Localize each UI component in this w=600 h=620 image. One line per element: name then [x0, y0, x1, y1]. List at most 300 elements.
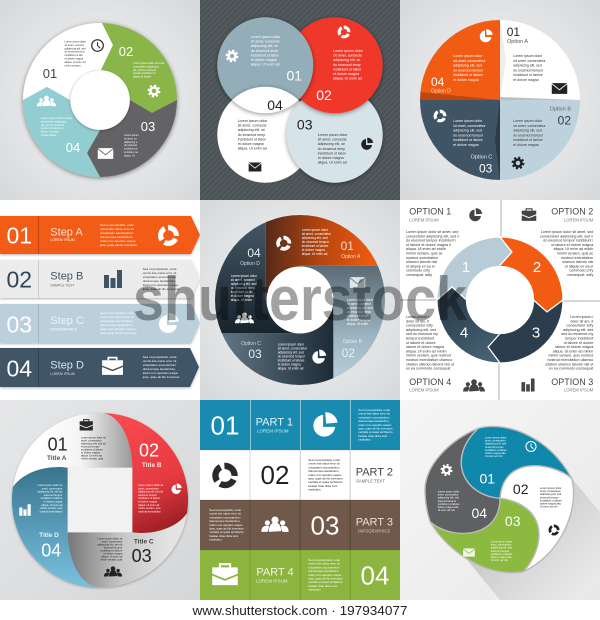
text A: incididunt ut labore	[302, 244, 329, 248]
text 01: Lorem ipsum dolor	[64, 40, 86, 44]
label: INFOGRAPHICS	[50, 328, 78, 332]
number 04: 04	[361, 560, 389, 590]
text 02: tempor incididunt ut	[133, 71, 156, 75]
text 1: ipsa, quae ab illo inventore	[358, 426, 393, 430]
text C: aliqua. Ut enim ad	[101, 554, 123, 558]
text 3: beatae vitae dicta sunt	[209, 534, 238, 538]
text: Sed ut perspiciatis, unde	[143, 267, 177, 271]
text 02: et dolore magna	[333, 72, 359, 76]
text D: adipiscing elit, sed do	[37, 490, 63, 494]
text 02: Lorem ipsum dolor sit amet,	[133, 61, 165, 65]
icon: gear	[513, 158, 523, 168]
text A: do eiusmod tempor	[302, 240, 330, 244]
ring segments	[23, 23, 177, 177]
row 4 tiles	[200, 550, 400, 600]
text C: incididunt ut labore	[101, 548, 123, 552]
number 02: 02	[139, 440, 159, 460]
text C: adipiscing elit, sed	[278, 350, 304, 354]
option D: Option D	[431, 88, 451, 94]
arrow ring	[437, 237, 563, 363]
text D: et dolore magna	[453, 78, 479, 82]
text B: do eiusmod tempor	[513, 133, 544, 137]
text: totam rem aperiam eaque	[100, 239, 136, 243]
text 02: incididunt ut labor	[333, 67, 362, 71]
option B: Option B	[343, 339, 363, 345]
option 1 text: commodo cnfy	[406, 269, 430, 273]
icon: gear	[149, 86, 159, 96]
part 1: PART 1	[256, 417, 293, 429]
text C: Lorem ipsum dolor	[278, 342, 305, 346]
part 4 label: LOREM IPSUM	[256, 578, 288, 584]
text 02: adipiscing elit, sed	[540, 492, 562, 496]
text 01: Lorem ipsum dolor	[485, 436, 507, 440]
text 4: ipsa, quae ab illo inventore	[308, 576, 343, 580]
number 01: 01	[480, 470, 495, 486]
text: voluptatem accusantium	[143, 363, 176, 367]
text A: Lorem ipsum dolor sit	[81, 436, 106, 440]
option 3 text: minim veniam, quis nostrud	[548, 354, 593, 358]
quadrants	[420, 20, 580, 180]
option 2 text: ullamco laboris nisi	[562, 260, 593, 264]
text 2: omnis iste natus error sit	[308, 462, 340, 466]
title D: Title D	[39, 532, 59, 539]
number 01: 01	[287, 68, 302, 84]
text 02: eiusmod tempor	[540, 495, 559, 499]
text 03: et dolore ma	[124, 151, 139, 154]
text D: aliqua. Ut enim ad	[41, 503, 63, 507]
circle 04	[217, 87, 313, 183]
text: ipsa, quae ab illo inventore	[100, 331, 137, 335]
text A: sit amet, consectetur	[513, 59, 546, 63]
number 01: 01	[211, 410, 239, 440]
number 03: 03	[132, 546, 152, 566]
option D: Option D	[240, 261, 260, 267]
icon: briefcase	[522, 209, 536, 221]
option 1 text: Lorem ipsum dolor sit amet, sed	[406, 230, 458, 234]
text 03: Ut enim ad min	[491, 558, 509, 562]
text 02: Lorem ipsum dolor	[540, 486, 562, 490]
numeral 3: 3	[532, 324, 540, 342]
text 3: Sed ut perspiciatis, unde	[209, 508, 241, 512]
option 4 text: ut labore et dolore	[406, 341, 436, 345]
text A: et dolore magna	[81, 450, 100, 454]
text 04: Lorem ipsum dolor	[438, 490, 459, 494]
option 3 text: ut labore et dolore	[564, 341, 593, 345]
text D: nostrud exercitation	[40, 509, 63, 513]
text 1: totam rem aperiam eaque	[358, 423, 392, 427]
text 2: Sed ut perspiciatis, unde	[308, 458, 340, 462]
option 2 text: consequat. adfy	[567, 273, 593, 277]
footer band	[0, 600, 600, 620]
text: doloremque laudantium,	[143, 279, 176, 283]
ribbon C	[0, 304, 200, 343]
swirl segments	[12, 413, 188, 587]
number 03: 03	[311, 510, 339, 540]
text A: aliqua. Ut enim ad	[81, 454, 102, 458]
option 2 text: ut aliquip ex ea ei	[565, 264, 593, 268]
icon: pie	[361, 137, 373, 150]
text B: eiusmod tempor	[138, 493, 157, 497]
text 02: labore et dolore	[133, 75, 152, 79]
text D: Lorem ipsum dolor sit	[38, 483, 63, 487]
circle 04 overlap	[231, 85, 300, 114]
text B: sit amet, consectetur	[513, 124, 546, 128]
text 1: omnis iste natus error sit	[358, 412, 390, 416]
text B: adipiscing elit, sed	[347, 306, 373, 310]
text 02: aliqua. Ut enim ad	[333, 77, 362, 81]
part 4: PART 4	[256, 567, 294, 579]
text 2: doloremque laudantium,	[308, 469, 340, 473]
text 02: amet, consectetur	[540, 489, 561, 493]
icon: cycle	[549, 525, 559, 535]
text 03: et dolore magna	[318, 156, 344, 160]
icon: envelope	[463, 548, 475, 557]
number 02: 02	[342, 346, 355, 360]
text 03: eiusmod tempor	[491, 549, 509, 553]
option B: Option B	[550, 106, 571, 112]
text 4: Sed ut perspiciatis, unde	[308, 558, 340, 562]
text 01: aliqua. Ut enim ad	[251, 63, 280, 67]
panel: quadrant pie	[400, 0, 600, 200]
text 04: incididunt ut labor	[238, 137, 267, 141]
text A: adipiscing elit, sed	[302, 236, 328, 240]
option 4 text: consectetur sdfy	[406, 324, 433, 328]
text C: incididunt ut labore	[278, 358, 305, 362]
text 01: Lorem ipsum dolor	[251, 35, 281, 39]
number 02: 02	[261, 460, 289, 490]
option 4 text: sed do eiusmod my	[406, 332, 438, 336]
icon: people	[235, 313, 254, 323]
text 02: Lorem ipsum dolor	[333, 49, 364, 53]
text: doloremque laudantium,	[143, 367, 176, 371]
text: voluptatem accusantium	[100, 231, 134, 235]
option 1 text: consectetur adipiscing elit, sed n	[406, 234, 459, 238]
text D: incididunt ut lab	[231, 290, 253, 294]
row 2 tiles	[200, 450, 400, 500]
text 03: do eiusmod	[124, 144, 138, 147]
step C: Step C	[50, 315, 84, 327]
text 01: incididunt ut lab	[64, 53, 83, 57]
icon: pie	[159, 312, 179, 333]
icon: cycle	[338, 26, 350, 38]
text 1: doloremque laudantium,	[358, 419, 390, 423]
number 02: 02	[316, 87, 332, 103]
text 01: minim veniam	[64, 63, 80, 67]
text: omnis iste natus error sit	[100, 315, 134, 319]
option 4 label: LOREM IPSUM	[409, 388, 439, 392]
option 1 text: consequat. adfy	[406, 273, 432, 277]
panel: tile grid	[200, 400, 400, 600]
text B: amet, consectetur	[138, 486, 159, 490]
option 2 label: LOREM IPSUM	[564, 218, 594, 222]
icon: people	[463, 379, 485, 391]
text B: sit amet, consect	[347, 302, 371, 306]
text C: Lorem ipsum dolor sit	[98, 536, 123, 540]
icon: envelope	[249, 163, 261, 171]
option C: Option C	[241, 341, 261, 347]
text 04: elit, sed do eiusmod	[41, 123, 64, 127]
text B: et dolore magna	[513, 143, 539, 147]
text A: Lorem ipsum dolor	[513, 54, 543, 58]
text D: adipiscing elit, sed	[453, 64, 482, 68]
panel: options arrow ring	[400, 200, 600, 400]
option 4 text: nostrud exercitation ullamco	[406, 358, 452, 362]
option A: Option A	[507, 39, 528, 45]
text B: et dolore magna	[138, 500, 158, 504]
option 4 text: minim veniam, quis nostrud	[406, 354, 451, 358]
icon: briefcase	[102, 358, 123, 375]
text 2: ipsa, quae ab illo inventore	[308, 476, 343, 480]
title B: Title B	[142, 462, 162, 469]
text 02: incididunt ut labore	[540, 498, 562, 502]
text 03: dolore magna aliq	[491, 555, 512, 559]
text B: Lorem ipsum dolor sit	[138, 483, 163, 487]
text 3: ipsa, quae ab illo inventore	[209, 526, 244, 530]
option 2 text: aliqua. Ut enim ad eiddh	[554, 247, 593, 251]
panel: interlocking circles	[200, 0, 400, 200]
text D: minim veniam, quis	[40, 506, 63, 510]
icon: pie	[312, 349, 326, 364]
icon: people	[37, 96, 56, 106]
text 3: veritatis et quasi architecto	[209, 530, 244, 534]
text 1: veritatis et quasi architecto	[358, 430, 393, 434]
text: totam rem aperiam eaque	[143, 371, 178, 375]
text 03: sit amet, consecte	[318, 138, 347, 142]
text 1: explicabo.	[358, 438, 372, 442]
step B: Step B	[50, 271, 83, 283]
number 04: 04	[7, 356, 32, 382]
text D: Lorem ipsum dolor	[453, 54, 483, 58]
option 3 text: sed do eiusmod my	[561, 332, 593, 336]
text D: do eiusmod temp	[231, 286, 255, 290]
option 4 title: OPTION 4	[409, 377, 451, 387]
text D: amet, consectetur	[42, 486, 62, 490]
option 2 text: commodo cnfy	[569, 269, 593, 273]
text A: sit amet, consectetur	[302, 232, 332, 236]
long shadow	[455, 478, 600, 600]
option 1 label: LOREM IPSUM	[409, 218, 439, 222]
watermark: shutterstock	[133, 265, 467, 334]
text 1: voluptatem accusantium	[358, 415, 390, 419]
icon: gear	[227, 51, 237, 61]
text 4: doloremque laudantium,	[308, 569, 340, 573]
icon: pie	[469, 208, 482, 221]
text 02: consectetur adipiscing	[133, 64, 159, 68]
text 01: et dolore magna	[251, 58, 277, 62]
row 1 tiles	[200, 400, 400, 450]
option C: Option C	[471, 154, 492, 160]
option 1 title: OPTION 1	[409, 207, 451, 217]
number 04: 04	[267, 97, 283, 113]
step D: Step D	[50, 359, 84, 371]
option 3 text: consectetur sdfy	[566, 324, 593, 328]
text 02: dolore magna aliq	[540, 502, 561, 506]
text 4: omnis iste natus error sit	[308, 562, 340, 566]
part 2 label: SAMPLE TEXT	[356, 478, 385, 484]
part 3: PART 3	[356, 516, 393, 528]
text C: adipiscing elit, sed do	[97, 542, 123, 546]
text C: et dolore magna	[453, 143, 479, 147]
text 01: aliqua. Ut enim ad	[64, 60, 86, 64]
option 4 text: tempor incididunt	[406, 336, 434, 340]
number 01: 01	[48, 434, 68, 454]
swirl segments	[425, 426, 574, 573]
text 3: totam rem aperiam eaque	[209, 523, 243, 527]
number 02: 02	[119, 44, 133, 59]
text 1: Sed ut perspiciatis, unde	[358, 408, 390, 412]
text D: adipiscing elit, sed	[231, 282, 257, 286]
text 01: eiusmod tempor	[485, 445, 504, 449]
text 04: incididunt ut labore	[438, 502, 460, 506]
text: totam rem aperiam eaque	[100, 327, 136, 331]
text 4: totam rem aperiam eaque	[308, 573, 342, 577]
text 4: beatae vitae dicta sunt	[308, 584, 337, 588]
text: ipsa, quae ab illo inventore	[143, 375, 180, 379]
number 03: 03	[479, 162, 493, 176]
text 04: adipiscing elit, se	[238, 128, 265, 132]
option 3 text: Lorem ipsum i	[570, 315, 593, 319]
text C: minim veniam, quis	[100, 558, 123, 562]
text: doloremque laudantium,	[100, 323, 133, 327]
text 03: adipiscing e	[124, 141, 138, 144]
text 2: beatae vitae dicta sunt	[308, 484, 337, 488]
text 03: do eiusmod temp	[318, 147, 345, 151]
option 4 text: adipiscing elit, sed	[406, 328, 436, 332]
text B: do eiusmod temp	[347, 310, 371, 314]
number 03: 03	[248, 347, 262, 361]
numeral 1: 1	[462, 259, 470, 276]
text 3: voluptatem accusantium	[209, 515, 241, 519]
step A: Step A	[50, 226, 83, 238]
number 01: 01	[507, 25, 520, 39]
number 03: 03	[505, 513, 521, 529]
text 01: amet, consectetur	[485, 439, 506, 443]
text 04: dolore magna aliq	[438, 505, 459, 509]
option 1 text: nostrud exercitation	[406, 256, 438, 260]
title C: Title C	[134, 538, 154, 546]
text D: et dolore magna	[44, 500, 63, 504]
option 1 text: minim veniam, quis ac	[406, 252, 443, 256]
option 4 text: aliqua. Ut enim ad minim	[406, 349, 447, 353]
option 2 text: do eiusmod tempor incididunt i	[543, 239, 593, 243]
option 3 text: aliqua. Ut enim ad minim	[553, 349, 593, 353]
option 2 title: OPTION 2	[551, 207, 593, 217]
circle 01	[217, 17, 313, 113]
text B: incididunt ut lab	[347, 314, 369, 318]
option 3 title: OPTION 3	[551, 377, 593, 387]
row 3 tiles	[200, 500, 400, 550]
text 04: sit amet, consecte	[238, 124, 267, 128]
text: voluptatem accusantium	[100, 319, 134, 323]
icon: pie	[480, 29, 493, 42]
icon: cycle	[158, 225, 179, 246]
text 01: adipiscing elit, sed	[64, 46, 86, 50]
ring quadrants	[215, 215, 385, 385]
option 3 text: dolor sit am, it	[570, 319, 593, 323]
text A: et dolore magna	[302, 248, 325, 252]
icon: cycle	[434, 110, 446, 122]
text 04: labore et dolore	[41, 130, 59, 134]
text B: incididunt ut labore	[513, 138, 543, 142]
text 3: omnis iste natus error sit	[209, 512, 241, 516]
text: omnis iste natus error sit	[143, 359, 177, 363]
text: Sed ut perspiciatis, unde	[100, 311, 134, 315]
text 04: Lorem ipsum dolor	[238, 119, 268, 123]
text 04: Lorem ipsum dolor sit amet,	[41, 116, 73, 120]
text 02: do eiusmod temp	[333, 63, 361, 67]
option 4 text: ex ea commodo consequat	[406, 367, 450, 371]
text B: aliqua. Ut enim	[347, 322, 368, 326]
icon: cycle	[212, 463, 238, 488]
title A: Title A	[47, 455, 67, 462]
text B: aliqua. Ut enim ad	[138, 503, 160, 507]
text 04: tempor incididunt ut	[41, 126, 64, 130]
text 01: adipiscing elit, se	[251, 44, 278, 48]
text 03: incididunt ut labore	[491, 552, 513, 556]
option 2 text: consectetur adipiscing elit, sed n	[540, 234, 593, 238]
text A: amet, consectetur	[81, 438, 102, 442]
option 3 text: tempor incididunt	[565, 336, 593, 340]
text 4: explicabo.	[308, 588, 322, 592]
circle 02	[287, 17, 383, 113]
text 02: elit, sed do eiusmod	[133, 68, 157, 72]
text 03: adipiscing elit, sed	[491, 546, 512, 550]
option 3 text: labore et dolore magna	[555, 345, 594, 349]
icon: cycle	[276, 236, 291, 251]
text: Sed ut perspiciatis, unde	[143, 355, 177, 359]
icon: gear	[441, 465, 452, 475]
text 01: adipiscing elit, sed	[485, 442, 507, 446]
text 03: Lorem ipsum	[124, 134, 138, 137]
text B: et dolore magna	[347, 318, 370, 322]
number 01: 01	[43, 66, 57, 81]
text 3: explicabo.	[209, 538, 223, 542]
number 04: 04	[66, 140, 80, 155]
number 04: 04	[41, 540, 61, 560]
text B: Lorem ipsum dolor	[513, 119, 543, 123]
icon: envelope	[552, 83, 567, 94]
text 04: do eiusmod temp	[238, 133, 265, 137]
text: ipsa, quae ab illo inventore	[143, 287, 180, 291]
number 04: 04	[472, 505, 487, 521]
text B: Lorem ipsum dolor	[347, 298, 374, 302]
icon: briefcase	[212, 564, 238, 585]
option 4 text: citation ullamco laboris nisi ut	[406, 362, 454, 366]
text A: et dolore magna	[513, 78, 539, 82]
text 04: Ut enim ad min	[438, 508, 456, 512]
option 3 label: LOREM IPSUM	[564, 388, 594, 392]
part 1 label: LOREM IPSUM	[257, 429, 289, 434]
icon: pie	[172, 483, 182, 494]
label: SAMPLE TEXT	[50, 284, 75, 288]
text D: sit amet, consect	[231, 278, 255, 282]
option 1 text: ullamco laboris nisi	[406, 260, 437, 264]
text D: do eiusmod tempor	[453, 68, 484, 72]
text B: incididunt ut labore	[138, 496, 161, 500]
number 04: 04	[247, 246, 261, 260]
text A: incididunt ut labore	[81, 448, 103, 452]
option 3 text: adipiscing elit, sed	[563, 328, 593, 332]
option 2 text: nostrud exercitation	[561, 256, 593, 260]
ribbon A	[0, 216, 200, 254]
option 1 text: do eiusmod tempor incididunt i	[406, 239, 456, 243]
text C: adipiscing elit, sed	[453, 129, 482, 133]
text A: eiusmod tempor	[81, 444, 100, 448]
text 01: incididunt ut labor	[251, 53, 280, 57]
text 4: veritatis et quasi architecto	[308, 580, 343, 584]
icon: bars	[19, 504, 31, 516]
label: LOREM IPSUM	[50, 238, 75, 242]
